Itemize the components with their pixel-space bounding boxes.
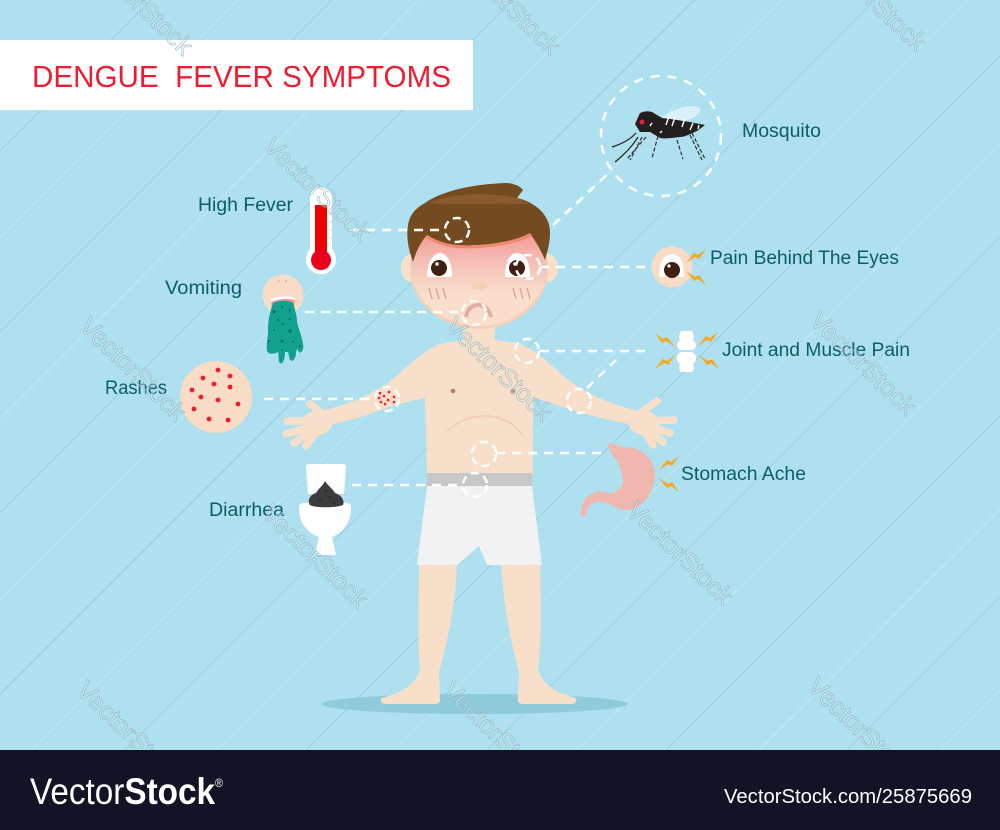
- waistband: [427, 473, 532, 486]
- icon: mosquito: [601, 76, 721, 196]
- right eye: [505, 253, 530, 277]
- left hand: [286, 404, 332, 446]
- icon: joint with pain: [655, 331, 719, 372]
- label: rashes: Rashes: [105, 378, 167, 399]
- face: [410, 206, 548, 329]
- icon: rash circle: [180, 361, 252, 433]
- footer bar: [0, 750, 1000, 830]
- icon: stomach with pain: [581, 443, 679, 516]
- title banner: [0, 40, 473, 110]
- figure: boy: [286, 183, 674, 704]
- label: vomiting: Vomiting: [165, 278, 242, 299]
- watermarks: VectorStock: [258, 132, 375, 247]
- watermarks: VectorStock: [74, 312, 191, 427]
- title banner: DENGUE FEVER SYMPTOMS: [32, 59, 451, 94]
- left eye: [427, 253, 452, 277]
- watermarks: VectorStock: [802, 672, 919, 787]
- icon: thermometer: [306, 187, 336, 274]
- watermarks: VectorStock: [256, 499, 373, 614]
- watermarks: VectorStock: [621, 496, 738, 611]
- label: high fever: High Fever: [198, 195, 294, 216]
- label: joint and muscle pain: Joint and Muscle Pain: [722, 340, 910, 361]
- label: stomach ache: Stomach Ache: [681, 464, 806, 485]
- footer logo: ®: [215, 776, 223, 790]
- icon: vomiting face: [262, 274, 304, 364]
- nipples and belly line: [447, 389, 523, 436]
- label: pain behind the eyes: Pain Behind The Eyes: [710, 248, 899, 269]
- dashed connectors and target rings: [264, 170, 652, 497]
- ears: [401, 254, 558, 282]
- legs: [381, 560, 576, 704]
- watermarks: VectorStock: [804, 306, 921, 421]
- icon: toilet: [299, 464, 351, 555]
- right hand: [629, 401, 674, 445]
- footer logo: VectorStock: [30, 771, 225, 812]
- footer reference: VectorStock.com/25875669: [724, 786, 972, 808]
- ground shadow: [322, 694, 628, 714]
- label: mosquito: Mosquito: [742, 121, 821, 142]
- elbow rash dots: [378, 391, 395, 405]
- shorts: [417, 486, 542, 565]
- watermarks: VectorStock: [437, 676, 554, 791]
- watermarks: VectorStock: [440, 312, 557, 427]
- icon: eye with pain: [652, 246, 706, 288]
- hair: [407, 183, 550, 262]
- watermarks: VectorStock: [71, 676, 188, 791]
- torso and arms: [325, 320, 640, 475]
- label: diarrhea: Diarrhea: [209, 500, 284, 521]
